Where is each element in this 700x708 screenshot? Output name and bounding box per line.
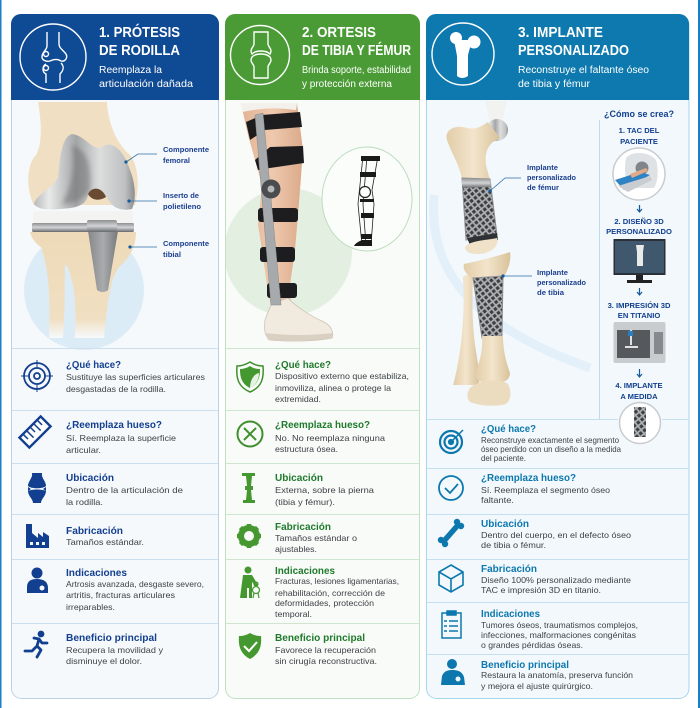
callouts: implants: personalizado xyxy=(527,173,577,182)
row: ubicación: Dentro del cuerpo, en el defecto óseo xyxy=(481,530,631,540)
icon: gear xyxy=(237,524,261,548)
row: qué hace: inmoviliza, alinea o protege la xyxy=(275,383,391,393)
panel: prótesis de rodilla xyxy=(11,14,219,698)
row: ubicación: (tibia y fémur). xyxy=(275,497,335,507)
illustration: knee prosthesis xyxy=(24,102,144,350)
arrow xyxy=(637,369,642,377)
panel: ortesis xyxy=(224,14,420,698)
icon: target xyxy=(21,360,53,392)
row: reemplaza hueso: Sí. Reemplaza la superficie xyxy=(66,433,176,443)
callouts: implants xyxy=(488,163,587,297)
row: beneficio principal xyxy=(25,632,164,666)
row: reemplaza hueso: ¿Reemplaza hueso? xyxy=(481,472,576,484)
row: indicaciones: Indicaciones xyxy=(481,608,540,620)
callouts: knee components xyxy=(124,145,209,259)
row: indicaciones: irreparables. xyxy=(66,602,115,612)
callouts: implants: personalizado xyxy=(537,278,587,287)
icon: runner xyxy=(25,632,47,657)
row: indicaciones: artritis, fracturas articulares xyxy=(66,590,175,600)
callouts: knee components: Inserto de xyxy=(163,191,199,200)
row: qué hace xyxy=(440,423,621,463)
header: implante xyxy=(426,14,689,100)
row: qué hace: ¿Qué hace? xyxy=(481,423,536,435)
row: reemplaza hueso xyxy=(439,472,610,505)
row: fabricación xyxy=(439,563,631,595)
header: ortesis xyxy=(225,14,420,100)
title: Brinda soporte, estabilidad xyxy=(302,65,411,76)
row: indicaciones: deformidades, protección xyxy=(275,598,374,608)
header: prótesis de rodilla xyxy=(11,14,219,100)
title xyxy=(99,23,193,90)
callouts: implants: de fémur xyxy=(527,183,559,192)
row: fabricación: Fabricación xyxy=(481,563,537,575)
row: fabricación: TAC e impresión 3D en titanio. xyxy=(481,585,601,595)
row: qué hace xyxy=(237,359,409,404)
icon: factory xyxy=(26,524,49,548)
panel: implante personalizado xyxy=(426,14,689,698)
step 3 xyxy=(608,301,671,363)
row: ubicación xyxy=(242,472,374,507)
row dividers panel 1 xyxy=(12,348,218,624)
callouts: implants: Implante xyxy=(527,163,558,172)
row: ubicación: Externa, sobre la pierna xyxy=(275,485,374,495)
callouts: knee components: tibial xyxy=(163,250,181,259)
step 1 xyxy=(613,126,665,200)
icon: femur bone xyxy=(432,23,494,85)
icon: x circle xyxy=(238,422,262,446)
row: beneficio principal: Restaura la anatomía, preserva función xyxy=(481,670,633,680)
step 2: 2. DISEÑO 3D xyxy=(614,217,664,226)
row: ubicación: Ubicación xyxy=(66,472,114,484)
row: beneficio principal: y mejora el ajuste quirúrgico. xyxy=(481,681,593,691)
callouts: knee components: femoral xyxy=(163,156,190,165)
row: reemplaza hueso xyxy=(238,419,385,454)
row: reemplaza hueso: articular. xyxy=(66,445,101,455)
icon: patient xyxy=(27,568,48,593)
row: reemplaza hueso xyxy=(19,416,176,455)
row: qué hace: desgastadas de la rodilla. xyxy=(66,384,166,394)
row: fabricación: Fabricación xyxy=(66,525,123,537)
arrow xyxy=(637,288,642,295)
row: indicaciones: temporal. xyxy=(275,609,312,619)
row: indicaciones xyxy=(442,608,638,650)
row: fabricación: Fabricación xyxy=(275,521,331,533)
row: fabricación: Diseño 100% personalizado mediante xyxy=(481,575,631,585)
title: DE TIBIA Y FÉMUR xyxy=(302,42,411,59)
step 1: PACIENTE xyxy=(620,137,658,146)
icon: clipboard xyxy=(442,611,461,638)
row: reemplaza hueso: estructura ósea. xyxy=(275,444,338,454)
callouts: knee components: Componente xyxy=(163,239,209,248)
process: cómo se crea: ¿Cómo se crea? xyxy=(604,109,674,120)
row: beneficio principal xyxy=(441,659,633,691)
row: qué hace: extremidad. xyxy=(275,394,321,404)
row: qué hace: óseo perdido con un diseño a la medida xyxy=(481,444,621,454)
title xyxy=(302,25,411,90)
row: ubicación: Ubicación xyxy=(481,518,529,530)
title: 1. PRÓTESIS xyxy=(99,23,180,41)
step 3: EN TITANIO xyxy=(618,311,660,320)
title: 3. IMPLANTE xyxy=(518,25,603,41)
title: Reconstruye el faltante óseo xyxy=(518,65,649,76)
row: ubicación xyxy=(28,472,183,507)
step 4: 4. IMPLANTE xyxy=(615,381,663,390)
icon: knee joint outline xyxy=(20,24,86,90)
row: indicaciones: rehabilitación, corrección de xyxy=(275,588,385,598)
row: beneficio principal: disminuye el dolor. xyxy=(66,656,142,666)
row: indicaciones xyxy=(240,565,399,619)
row: qué hace xyxy=(21,359,205,394)
row: indicaciones: infecciones, malformaciones congénitas xyxy=(481,630,636,640)
row: fabricación: ajustables. xyxy=(275,544,317,554)
row: qué hace: del paciente. xyxy=(481,453,526,463)
title: y protección externa xyxy=(302,79,392,90)
icon: target arrow xyxy=(440,430,463,453)
row: qué hace: ¿Qué hace? xyxy=(275,359,331,371)
arrow xyxy=(637,205,642,212)
callouts: knee components: polietileno xyxy=(163,202,202,211)
row: ubicación: la rodilla. xyxy=(66,497,103,507)
row: qué hace: Sustituye las superficies articulares xyxy=(66,372,205,382)
icon: shield leaf xyxy=(237,362,263,392)
row: indicaciones xyxy=(27,567,204,612)
process: cómo se crea xyxy=(604,109,674,401)
row: beneficio principal: Favorece la recuperación xyxy=(275,645,376,655)
title: Reemplaza la xyxy=(99,65,162,76)
column divider xyxy=(598,120,600,419)
row: reemplaza hueso: No. No reemplaza ninguna xyxy=(275,433,385,443)
icon: cube xyxy=(439,565,463,592)
row: indicaciones: Fracturas, lesiones ligamentarias, xyxy=(275,576,399,586)
row: indicaciones: Indicaciones xyxy=(66,567,127,579)
row: qué hace: Dispositivo externo que estabiliza, xyxy=(275,371,409,381)
row: beneficio principal: Recupera la movilidad y xyxy=(66,645,164,655)
row: indicaciones: Artrosis avanzada, desgaste severo, xyxy=(66,579,204,589)
icon: brace xyxy=(242,473,255,503)
row: ubicación: de tibia o fémur. xyxy=(481,540,546,550)
row: beneficio principal: sin cirugía reconstructiva. xyxy=(275,656,377,666)
row: ubicación xyxy=(438,518,631,550)
row: indicaciones: o grandes pérdidas óseas. xyxy=(481,640,583,650)
row: reemplaza hueso: Sí. Reemplaza el segmento óseo xyxy=(481,485,610,495)
illustration: bone with implants xyxy=(433,101,590,406)
illustration: leg brace xyxy=(224,103,352,341)
row: beneficio principal: Beneficio principal xyxy=(66,632,157,644)
step 4 implant image xyxy=(620,402,660,444)
step 2: PERSONALIZADO xyxy=(606,227,672,236)
step 4 xyxy=(615,381,663,401)
step 4: A MEDIDA xyxy=(620,392,658,401)
title: DE RODILLA xyxy=(99,43,180,59)
row dividers panel 2 xyxy=(226,348,419,624)
inset: brace diagram xyxy=(322,147,412,251)
row: fabricación xyxy=(237,521,357,554)
step 3: 3. IMPRESIÓN 3D xyxy=(608,301,671,310)
row: indicaciones: Indicaciones xyxy=(275,565,335,577)
row: reemplaza hueso: ¿Reemplaza hueso? xyxy=(275,419,370,431)
row: reemplaza hueso: ¿Reemplaza hueso? xyxy=(66,419,162,431)
icon: joint outline xyxy=(230,26,290,84)
icon: check circle xyxy=(439,476,463,500)
row: fabricación: Tamaños estándar. xyxy=(66,537,144,547)
icon: patient xyxy=(441,659,465,685)
row: fabricación: Tamaños estándar o xyxy=(275,533,357,543)
icon: adult and child xyxy=(240,566,260,598)
icon: bone xyxy=(438,519,464,547)
callouts: knee components: Componente xyxy=(163,145,209,154)
row: reemplaza hueso: faltante. xyxy=(481,495,514,505)
title: 2. ORTESIS xyxy=(302,25,376,41)
row: beneficio principal: Beneficio principal xyxy=(275,632,365,644)
row: ubicación: Ubicación xyxy=(275,472,323,484)
title: de tibia y fémur xyxy=(518,79,591,90)
title: PERSONALIZADO xyxy=(518,43,629,59)
row: ubicación: Dentro de la articulación de xyxy=(66,485,183,495)
callouts: implants: de tibia xyxy=(537,288,565,297)
icon: ruler xyxy=(19,416,51,448)
row: qué hace: ¿Qué hace? xyxy=(66,359,121,371)
row: beneficio principal xyxy=(239,632,377,666)
step 1: 1. TAC DEL xyxy=(619,126,660,135)
title: articulación dañada xyxy=(99,79,193,90)
row: qué hace: Reconstruye exactamente el segmento xyxy=(481,435,619,445)
step 2 xyxy=(606,217,672,283)
row: beneficio principal: Beneficio principal xyxy=(481,659,569,671)
row: fabricación xyxy=(26,524,144,548)
row: indicaciones: Tumores óseos, traumatismos complejos, xyxy=(481,620,638,630)
title xyxy=(518,25,649,90)
icon: shield check xyxy=(239,633,261,659)
callouts: implants: Implante xyxy=(537,268,568,277)
row dividers panel 3 xyxy=(427,420,689,654)
icon: knee xyxy=(28,473,46,503)
